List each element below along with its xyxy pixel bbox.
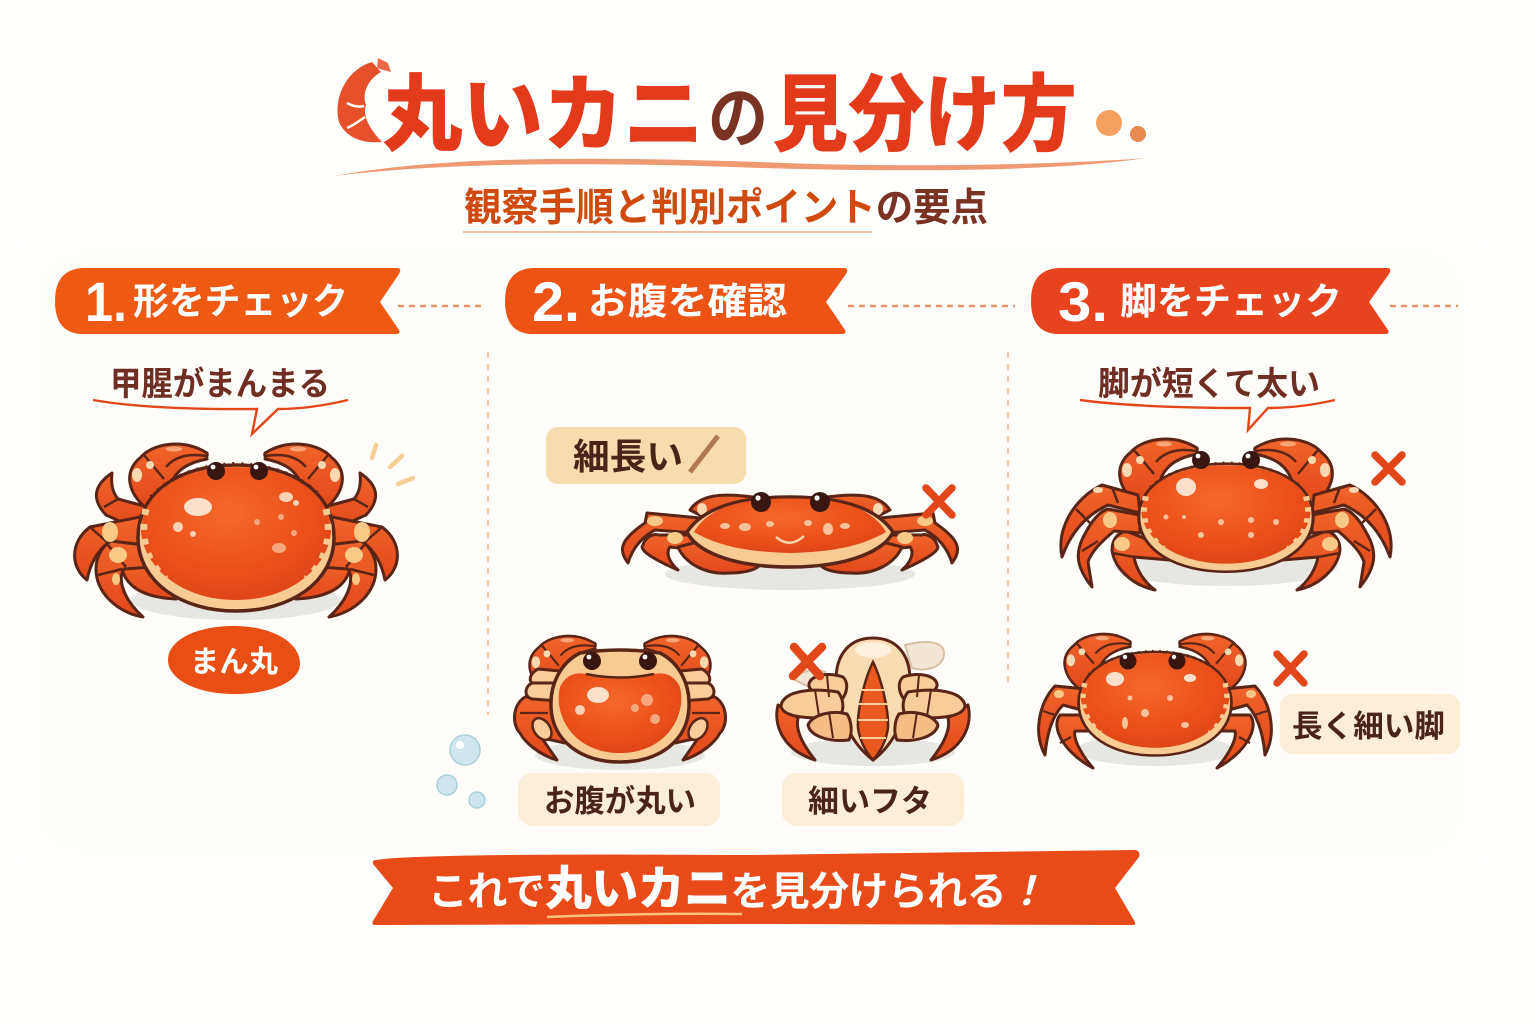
label: thin flap xyxy=(782,773,964,826)
thin legs crab xyxy=(1039,634,1271,768)
title particle: の xyxy=(708,81,768,157)
decorative dots xyxy=(1096,110,1146,142)
title end: 見分け方 xyxy=(772,68,1077,162)
step 1 number: 1. xyxy=(85,270,127,333)
panel: step 3 xyxy=(1031,268,1460,768)
icon: shrimp claw by title xyxy=(337,58,391,142)
speech label: 脚が短くて太い xyxy=(1098,365,1320,402)
label: round belly xyxy=(518,773,720,826)
speech label: 甲腥がまんまる xyxy=(110,365,330,402)
label: long thin legs: 長く細い脚 xyxy=(1292,709,1445,744)
round belly crab xyxy=(515,636,725,770)
label: long thin legs xyxy=(1280,694,1460,754)
dashed divider 1 xyxy=(487,352,489,715)
subtitle underline xyxy=(463,231,872,233)
step 1 ribbon xyxy=(55,268,400,334)
speech line xyxy=(1080,400,1335,430)
step 1 heading: 形をチェック xyxy=(133,281,348,322)
speech line xyxy=(93,400,348,434)
short legs crab xyxy=(1061,439,1391,590)
panel: step 1 xyxy=(55,268,413,694)
label: thin flap: 細いフタ xyxy=(808,784,932,819)
x mark: flat crab xyxy=(926,488,952,515)
step 3 heading: 脚をチェック xyxy=(1120,281,1342,322)
sparkle marks xyxy=(372,445,413,484)
flat crab xyxy=(622,492,958,590)
step 3 number: 3. xyxy=(1058,270,1108,333)
banner text: これで丸いカニを見分けられる！ xyxy=(428,862,1046,915)
bubbles xyxy=(437,735,485,808)
bottom banner xyxy=(372,850,1139,925)
label: slender: 細長い xyxy=(573,436,683,477)
title: 丸いカニ xyxy=(382,68,704,162)
label: round belly: お腹が丸い xyxy=(544,784,696,819)
label: slender xyxy=(546,427,746,484)
step 2 heading: お腹を確認 xyxy=(588,281,787,322)
step 3 ribbon xyxy=(1031,268,1390,334)
round crab xyxy=(75,444,397,620)
subtitle: 観察手順と判別ポイントの要点 xyxy=(464,187,988,230)
dashed divider 2 xyxy=(1007,352,1009,682)
x mark: underside xyxy=(793,647,822,676)
step 2 ribbon xyxy=(505,268,847,334)
dashed connector 3 xyxy=(1390,305,1458,307)
dashed connector 2 xyxy=(848,305,1015,307)
x mark: thin legs xyxy=(1277,654,1304,683)
x mark: short legs xyxy=(1375,455,1402,482)
underside crab xyxy=(777,638,969,766)
label: round pill: まん丸 xyxy=(190,646,278,679)
title swoosh xyxy=(333,158,1147,176)
label: round pill xyxy=(168,626,300,694)
banner underline xyxy=(547,914,742,917)
dashed connector 1 xyxy=(398,305,482,307)
panel: step 2 xyxy=(437,268,969,826)
step 2 number: 2. xyxy=(532,270,580,333)
